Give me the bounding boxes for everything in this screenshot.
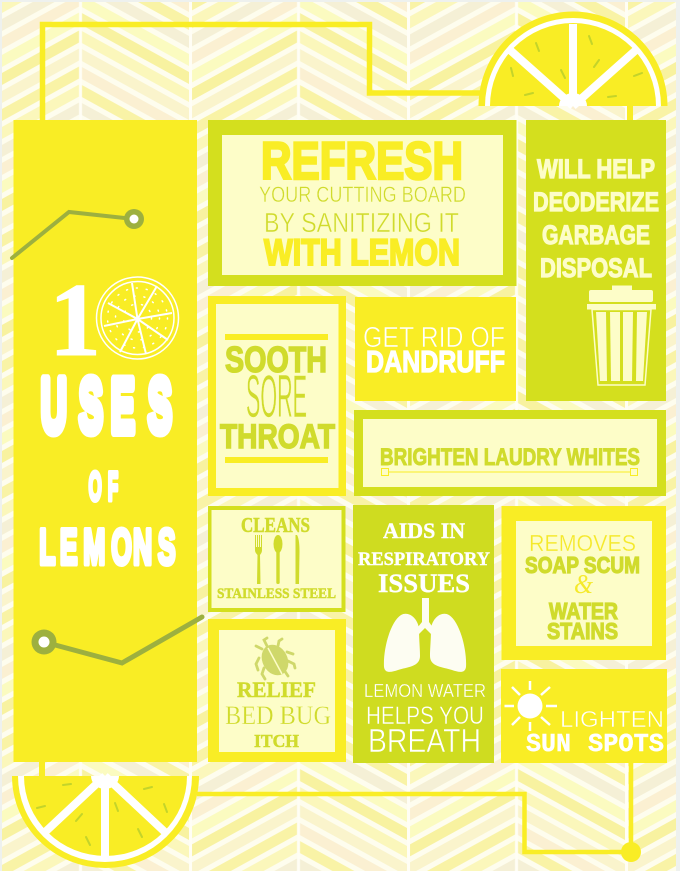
icon: bug <box>256 638 295 680</box>
icon: top lemon half <box>478 12 668 106</box>
connector: top yellow line <box>42 24 480 122</box>
panel: bed bug <box>208 619 346 762</box>
connector: bottom yellow line <box>197 763 631 852</box>
text: spots: SPOTS <box>588 729 664 759</box>
panel: stainless steel <box>208 506 346 612</box>
text: breath: BREATH <box>368 722 481 759</box>
icon: bottom lemon half <box>12 776 199 868</box>
text: by sanitizing it: BY SANITIZING IT <box>264 207 459 238</box>
text: removes: REMOVES <box>529 530 636 556</box>
text: water: WATER <box>549 598 618 624</box>
text: respiratory: RESPIRATORY <box>358 549 490 570</box>
panel: soap scum <box>502 506 666 660</box>
text: sooth: SOOTH <box>225 339 327 380</box>
icon: lemon slice <box>96 277 178 359</box>
bottom bar <box>225 457 328 463</box>
panel: dandruff <box>355 297 516 401</box>
title word OF: OF <box>89 465 118 509</box>
text: will help: WILL HELP <box>537 154 655 184</box>
text: ampersand: & <box>574 569 593 599</box>
text: lemon water: LEMON WATER <box>364 681 486 701</box>
panel: sooth sore throat: SORE <box>246 363 307 430</box>
panel: sooth sore throat <box>208 296 346 496</box>
text: itch: ITCH <box>254 731 299 751</box>
icon: lungs <box>384 598 466 672</box>
connector: lemon stem top right <box>627 104 633 122</box>
text: sun: SUN <box>526 729 571 759</box>
title number 1: 1 <box>49 261 101 378</box>
panel: laundry whites <box>354 410 666 496</box>
text: soap scum: SOAP SCUM <box>525 552 640 578</box>
title word LEMONS: LEMONS <box>39 520 176 575</box>
connector: lemon stem bottom left <box>39 760 45 778</box>
heading: with lemon: WITH LEMON <box>264 232 460 273</box>
underline ornament <box>382 468 638 476</box>
title word USES: USES <box>41 363 172 449</box>
top bar <box>225 334 328 340</box>
connector: green top <box>12 209 144 258</box>
text: aids in: AIDS IN <box>383 518 465 543</box>
text: lighten: LIGHTEN <box>560 706 664 732</box>
panel: respiratory <box>353 505 494 763</box>
text: throat: THROAT <box>220 418 335 456</box>
panel: refresh <box>208 120 516 286</box>
text: disposal: DISPOSAL <box>540 253 652 283</box>
heading: refresh: REFRESH <box>261 132 463 191</box>
icon: cutlery <box>255 535 300 584</box>
text: bed bug: BED BUG <box>225 701 331 730</box>
icon: sun <box>504 681 557 731</box>
text: garbage: GARBAGE <box>542 220 650 250</box>
connector end dot <box>621 842 641 862</box>
connector: green bottom <box>32 617 202 663</box>
panel: title <box>14 120 197 762</box>
text: relief: RELIEF <box>237 677 316 702</box>
text: get rid of: GET RID OF <box>363 322 505 354</box>
text: cleans: CLEANS <box>241 513 310 537</box>
text: helps you: HELPS YOU <box>366 702 484 730</box>
icon: trash can <box>587 286 656 385</box>
panel: sun spots <box>501 669 667 763</box>
text: stains: STAINS <box>547 618 618 644</box>
text: stainless steel: STAINLESS STEEL <box>217 586 336 602</box>
text: dandruff: DANDRUFF <box>366 344 505 379</box>
text: issues: ISSUES <box>378 569 470 598</box>
text: your cutting board: YOUR CUTTING BOARD <box>259 182 466 207</box>
panel: garbage disposal <box>526 120 666 401</box>
